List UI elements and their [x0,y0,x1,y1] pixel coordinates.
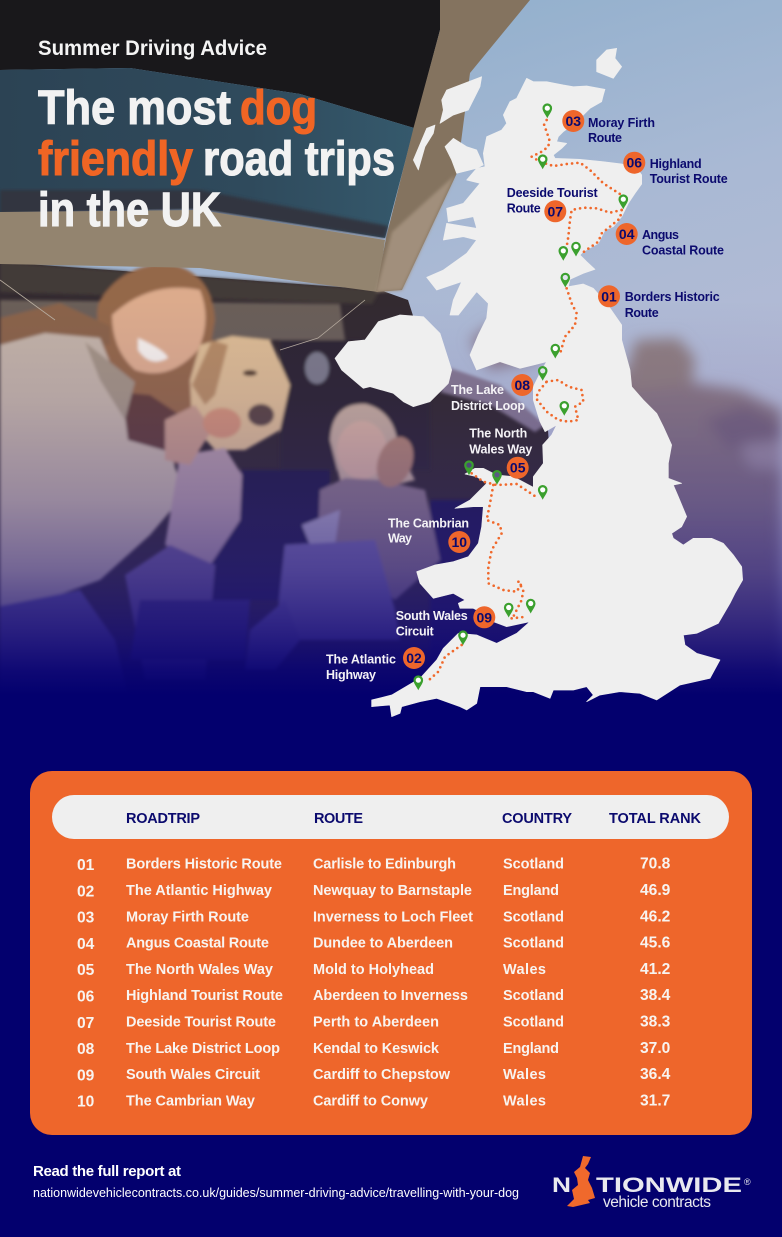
pin [458,630,468,645]
hand and treat [165,405,212,465]
pin [571,242,581,256]
title: in the UK [38,184,221,237]
navy fade overlay [0,300,782,700]
route label 02: Highway [326,668,376,682]
row 06: Scotland [503,988,564,1004]
row 03 [77,908,671,927]
table header: ROUTE [314,811,363,827]
car frame [376,0,530,292]
row 03: Scotland [503,909,564,925]
route label 06: Tourist Route [650,172,728,186]
row 08: England [503,1041,559,1057]
route label 04: 04 [619,226,635,242]
child [330,404,415,490]
logo: Nationwide vehicle contracts: ® [744,1177,751,1187]
route label 06: Highland [650,157,702,171]
row 07: Perth to Aberdeen [313,1014,439,1030]
footer call to action: nationwidevehiclecontracts.co.uk/guides/summer-driving-advice/travelling-with-your-dog [33,1186,519,1200]
row 01: Scotland [503,857,564,873]
light bulb [305,352,329,384]
route label 09 [396,606,495,638]
route pins [414,103,628,690]
route label 05 [469,427,532,479]
route label 02: 02 [406,650,422,666]
route label 07: Deeside Tourist [507,186,599,200]
row 03: Inverness to Loch Fleet [313,909,473,925]
row 06: Highland Tourist Route [126,988,283,1004]
route label 05: 05 [510,460,526,476]
row 07: 38.3 [640,1014,671,1030]
route label 03: Moray Firth [588,116,655,130]
route label 01: 01 [601,288,617,304]
row 09: 09 [77,1067,95,1084]
title: The most [38,82,231,135]
table background [30,771,752,1135]
route label 09: South Wales [396,609,468,623]
row 08: Kendal to Keswick [313,1041,440,1057]
route label 04: Angus [642,228,679,242]
hero photo: family and dog in car boot [0,0,782,771]
route label 03 [562,110,655,145]
logo: Nationwide vehicle contracts: N [552,1174,571,1197]
woman sweater [0,333,184,606]
row 06: Aberdeen to Inverness [313,988,468,1004]
route label 09: Circuit [396,624,435,638]
row 02 [77,882,671,900]
dotted routes [426,120,622,683]
navy base [0,696,782,771]
row 10: Cardiff to Conwy [313,1093,428,1109]
row 09: 36.4 [640,1066,671,1083]
row 07: 07 [77,1015,94,1032]
title: road trips [203,133,395,186]
car rear window [0,68,414,238]
route label 09: 09 [477,609,492,625]
dog [190,336,290,450]
table header: COUNTRY [502,811,572,827]
woman hair [97,264,215,470]
route label 06 [623,152,728,186]
row 07 [77,1014,671,1032]
row 02: The Atlantic Highway [126,883,272,899]
row 02: England [503,883,559,899]
row 09 [77,1066,671,1084]
pin [542,103,552,118]
row 10 [77,1092,670,1111]
row 04: 45.6 [640,935,671,952]
woman face [112,288,206,373]
row 05: 05 [77,962,95,979]
route label 06: 06 [627,155,642,171]
row 05 [77,961,671,979]
footer call to action: Read the full report at [33,1163,181,1180]
route label 04 [616,223,724,258]
logo: Nationwide vehicle contracts: TIONWIDE [596,1174,742,1197]
route label 01: Borders Historic [625,290,720,304]
map of the UK with routes [326,48,743,717]
row 10: 31.7 [640,1092,670,1109]
route label 01 [598,285,720,320]
row 03: Moray Firth Route [126,909,249,925]
row 04: Dundee to Aberdeen [313,936,453,952]
route label 10 [388,516,470,553]
pin [538,485,548,500]
route label 03: 03 [566,113,581,129]
route label 10: 10 [452,534,467,550]
blanket [130,600,250,660]
table header: ROADTRIP [126,811,200,827]
logo: Nationwide vehicle contracts [552,1156,751,1211]
route label 08: 08 [515,377,530,393]
row 05: 41.2 [640,961,671,978]
panel: ranking table [30,771,752,1135]
row 08: 08 [77,1041,95,1058]
row 04 [77,935,671,953]
row 04: 04 [77,936,95,953]
row 02: Newquay to Barnstaple [313,883,472,899]
row 02: 46.9 [640,882,671,899]
pin [618,194,628,209]
car lid lining [0,0,452,128]
logo: Nationwide vehicle contracts: vehicle contracts [603,1194,711,1211]
pin [526,599,536,614]
row 02: 02 [77,883,95,900]
pin [464,460,474,475]
row 05: Mold to Holyhead [313,962,434,978]
route label 02 [326,647,425,682]
row 01 [77,856,671,874]
title: dog [240,82,317,135]
row 10: Wales [503,1093,546,1109]
row 09: Cardiff to Chepstow [313,1067,451,1083]
row 10: 10 [77,1094,95,1111]
row 09: Wales [503,1067,546,1083]
subtitle: Summer Driving Advice [38,37,267,60]
row 06: 38.4 [640,987,671,1004]
route label 05: The North [469,427,527,441]
row 08: The Lake District Loop [126,1041,280,1057]
row 01: Borders Historic Route [126,857,282,873]
row 01: 70.8 [640,856,671,873]
route label 01: Route [625,306,659,320]
pin [560,273,570,288]
route label 10: Way [388,532,412,546]
table header: TOTAL RANK [609,811,702,827]
pin [538,366,548,381]
pin [504,603,514,618]
row 06 [77,987,671,1006]
car lid tan band [0,210,385,292]
row 07: Deeside Tourist Route [126,1014,276,1030]
route label 10: The Cambrian [388,516,469,530]
row 08 [77,1040,671,1058]
row 01: 01 [77,857,95,874]
row 07: Scotland [503,1014,564,1030]
pin [492,470,502,485]
pin [550,344,560,358]
pin [558,246,568,261]
title [38,82,395,237]
route label 05: Wales Way [469,442,532,456]
route label 08: The Lake [451,383,504,397]
row 03: 03 [77,910,95,927]
route label 03: Route [588,131,622,145]
row 04: Scotland [503,936,564,952]
row 05: The North Wales Way [126,962,273,978]
row 04: Angus Coastal Route [126,936,269,952]
pin [560,401,569,416]
route label 08 [451,374,533,413]
pin [538,154,548,169]
car interior [0,262,556,705]
title: friendly [38,133,193,186]
table header [52,795,729,839]
row 09: South Wales Circuit [126,1067,260,1083]
row 08: 37.0 [640,1040,671,1057]
row 01: Carlisle to Edinburgh [313,857,456,873]
row 10: The Cambrian Way [126,1093,255,1109]
route label 07: 07 [548,203,563,219]
route label 08: District Loop [451,399,525,413]
row 06: 06 [77,988,95,1006]
pin [414,675,423,690]
route label 02: The Atlantic [326,652,396,666]
row 05: Wales [503,962,546,978]
route label 04: Coastal Route [642,244,724,258]
route label 07 [507,186,599,222]
route label 07: Route [507,202,541,216]
fairy light string [0,280,365,350]
row 03: 46.2 [640,908,671,925]
map landmass [335,48,743,717]
footer call to action [33,1163,519,1200]
